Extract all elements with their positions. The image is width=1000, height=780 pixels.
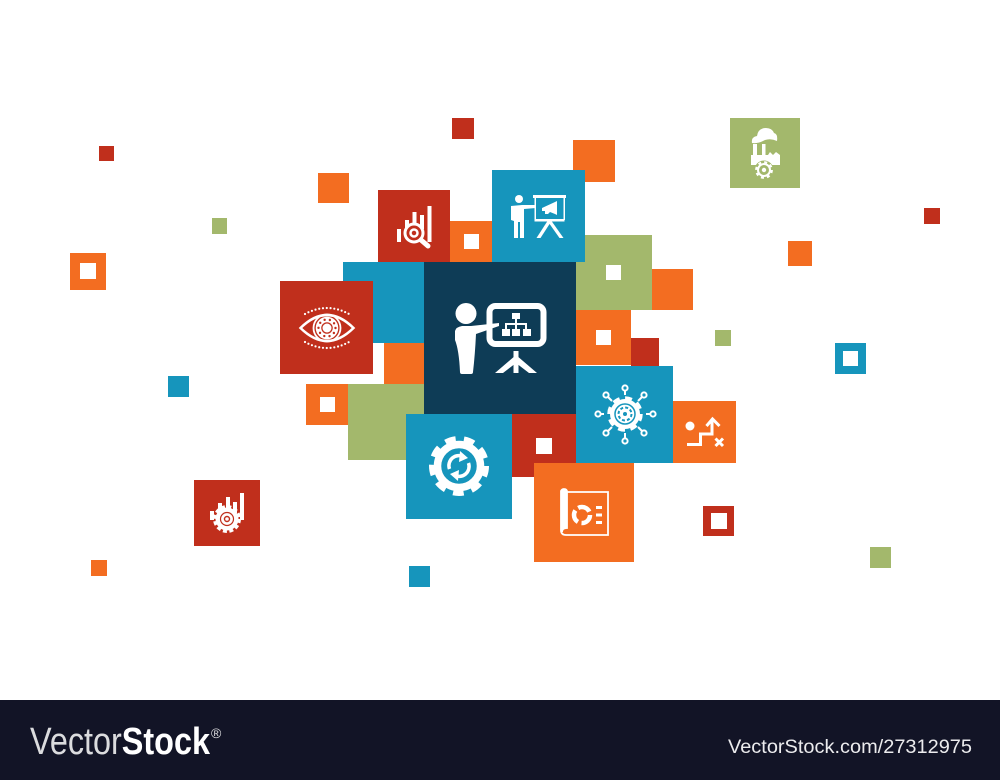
tile: green with white square [576,235,652,310]
panel: chart with magnifier [378,190,450,262]
panel: factory [730,118,800,188]
panel: gear network [576,366,673,463]
icon: gear with radiating nodes [595,385,656,444]
tile: orange with white square, left [306,384,348,425]
panel: chart with gear [194,480,260,546]
background tiles of the cluster [343,262,693,460]
panel: blueprint [534,463,634,562]
icon: bars and gear [210,493,244,532]
icon: bars and magnifier [397,206,432,246]
panel: centre presenter with org chart [424,262,576,414]
outlined square: orange left [70,253,106,290]
outlined square: blue right [835,343,866,374]
icon: steps with arrow and cross [686,419,723,446]
icon: blueprint scroll with ring chart [561,489,608,535]
footer image id: VectorStock.com/27312975 [728,737,972,758]
panel: stairs decision [673,401,736,463]
outlined square: red lower right [703,506,734,536]
tile: orange with white square, right [576,310,631,365]
registered mark: ® [211,725,222,741]
tile: orange with white square, top [450,221,492,262]
scattered small squares [91,118,940,587]
icon: presenter and board [511,195,566,238]
panel: presenter with megaphone board [492,170,585,262]
icon: gear with refresh arrows [433,440,485,492]
panel: gear with refresh arrows [406,414,512,519]
panel: eye [280,281,373,374]
footer logo: VectorStock [30,721,211,763]
icon: presenter at org chart board [455,303,544,374]
footer bar [0,700,1000,780]
icon: eye with dotted lashes [300,308,354,348]
tile: red with white square, bottom [512,414,576,477]
icon: factory with cloud and gear [751,128,780,180]
